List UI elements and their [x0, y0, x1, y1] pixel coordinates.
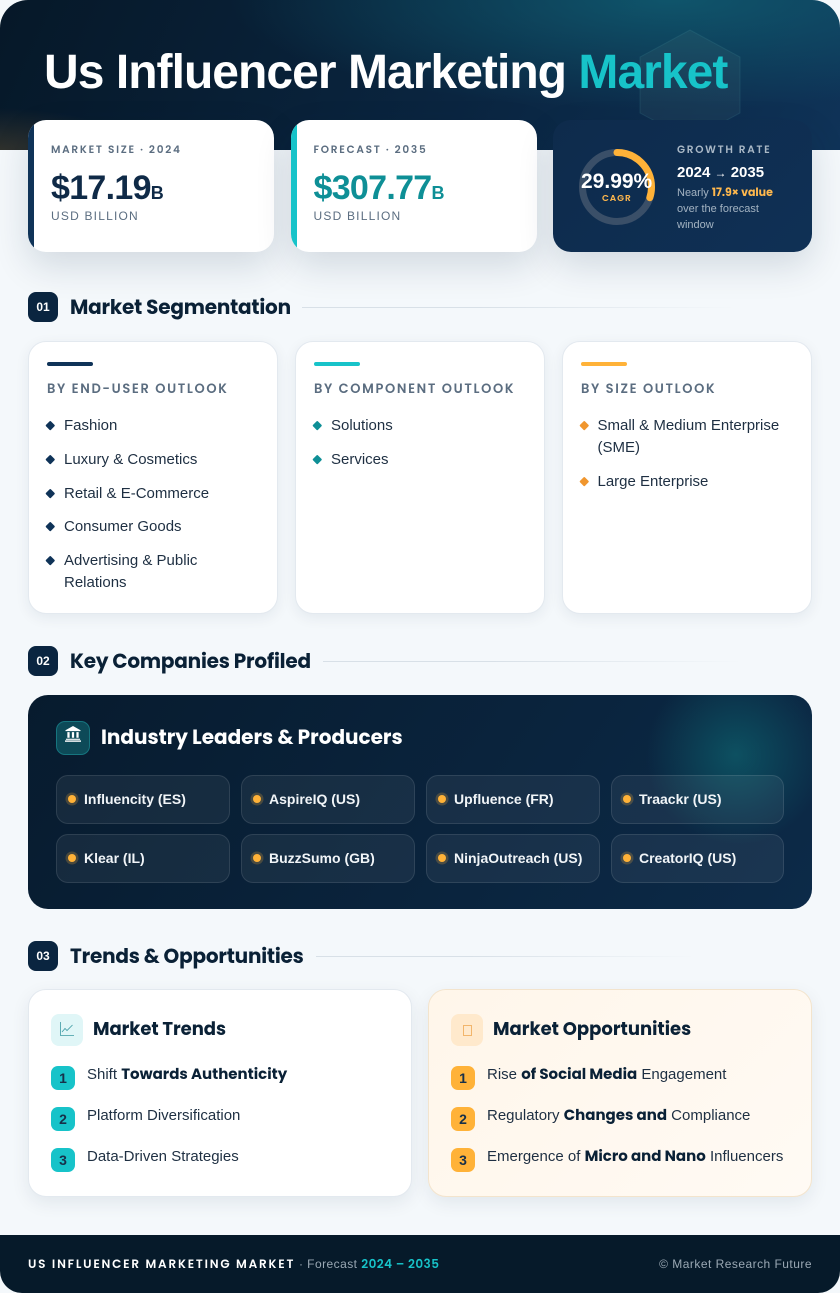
trend 3: 3 [59, 1152, 67, 1168]
company chip: BuzzSumo (GB) [269, 850, 375, 866]
list: Relations [64, 574, 127, 591]
footer credit: © Market Research Future [659, 1257, 812, 1271]
company chip [241, 775, 415, 824]
company chip [56, 834, 230, 883]
section 1 badge: 01 [36, 300, 50, 314]
list: Services [331, 451, 389, 468]
trend 3 [51, 1148, 239, 1172]
stat card: forecast [291, 120, 537, 252]
section 2 badge: 02 [36, 654, 50, 668]
list [312, 417, 393, 468]
panel: size outlook [562, 341, 812, 614]
icon: bank [56, 721, 90, 755]
trend 1: 1 [59, 1070, 67, 1086]
list: Luxury & Cosmetics [64, 451, 197, 468]
list: Large Enterprise [598, 473, 708, 490]
opportunity 2: 2 [459, 1111, 467, 1127]
list: Retail & E-Commerce [64, 485, 209, 502]
list: Consumer Goods [64, 518, 182, 535]
stat card: growth rate [553, 120, 812, 252]
company chip: Traackr (US) [639, 791, 721, 807]
trend 1: Shift Towards Authenticity [87, 1064, 287, 1085]
company chip [56, 775, 230, 824]
opportunity 1: Rise of Social Media Engagement [487, 1064, 726, 1085]
section 1 badge [28, 292, 58, 322]
list: Fashion [64, 417, 117, 434]
list: Solutions [331, 417, 393, 434]
panel heading: BY SIZE OUTLOOK [581, 379, 716, 398]
panel title: Market Trends [93, 1017, 226, 1042]
trend 2: Platform Diversification [87, 1107, 240, 1124]
growth note: Nearly 17.9× value [677, 184, 773, 200]
panel: component outlook [295, 341, 545, 614]
value: $17.19B [51, 169, 164, 207]
company chip [426, 775, 600, 824]
growth label: GROWTH RATE [677, 142, 771, 157]
opportunity 3: Emergence of Micro and Nano Influencers [487, 1146, 783, 1167]
panel title: Industry Leaders & Producers [101, 723, 403, 751]
trend 1 [51, 1064, 288, 1090]
section 2 heading: Key Companies Profiled [70, 647, 311, 675]
trend 3: Data-Driven Strategies [87, 1148, 239, 1165]
company chip [426, 834, 600, 883]
panel heading: BY COMPONENT OUTLOOK [314, 379, 515, 398]
opportunity 3: 3 [459, 1152, 467, 1168]
opportunity 2: Regulatory Changes and Compliance [487, 1105, 750, 1126]
company chip: NinjaOutreach (US) [454, 850, 582, 866]
company chip [611, 834, 784, 883]
unit: USD BILLION [51, 209, 139, 223]
panel: market trends [28, 989, 412, 1197]
company chip [241, 834, 415, 883]
section 2 badge [28, 646, 58, 676]
company chip: Upfluence (FR) [454, 791, 554, 807]
section 1 heading: Market Segmentation [70, 293, 291, 321]
panel: market opportunities [428, 989, 812, 1197]
section 3 heading: Trends & Opportunities [70, 942, 304, 970]
list: Small & Medium Enterprise [598, 417, 779, 434]
unit: USD BILLION [314, 209, 401, 223]
trend 2 [51, 1107, 240, 1131]
list [46, 417, 209, 591]
label: MARKET SIZE · 2024 [51, 142, 182, 157]
CAGR label: CAGR [602, 193, 632, 205]
header banner [0, 0, 840, 150]
opportunity 1: 1 [459, 1070, 467, 1086]
footer [0, 1235, 840, 1293]
list: (SME) [598, 439, 640, 456]
company chip: Klear (IL) [84, 850, 145, 866]
panel: companies [28, 695, 812, 909]
growth note: window [677, 219, 714, 231]
CAGR value: 29.99% [581, 170, 652, 193]
company chip: Influencity (ES) [84, 791, 186, 807]
icon: chart [51, 1014, 83, 1046]
company chip: CreatorIQ (US) [639, 850, 736, 866]
CAGR ring [579, 149, 655, 225]
section 3 badge [28, 941, 58, 971]
stat card: market size [28, 120, 274, 252]
panel title: Market Opportunities [493, 1017, 691, 1042]
company chip: AspireIQ (US) [269, 791, 360, 807]
growth note: over the forecast [677, 203, 759, 215]
panel heading: BY END-USER OUTLOOK [47, 379, 229, 398]
trend 2: 2 [59, 1111, 67, 1127]
section 3 badge: 03 [36, 949, 50, 963]
footer left text: US INFLUENCER MARKETING MARKET · Forecast 2024 – 2035 [28, 1256, 439, 1273]
growth note [677, 184, 773, 231]
value: $307.77B [314, 169, 445, 207]
title: Us Influencer Marketing Market [44, 46, 727, 99]
icon: missing glyph box [451, 1014, 483, 1046]
decorative hexagon [640, 30, 740, 120]
list [580, 417, 779, 490]
list: Advertising & Public [64, 552, 197, 569]
label: FORECAST · 2035 [314, 142, 427, 157]
growth years: 2024 → 2035 [677, 164, 764, 181]
panel: end-user outlook [28, 341, 278, 614]
company chip [611, 775, 784, 824]
